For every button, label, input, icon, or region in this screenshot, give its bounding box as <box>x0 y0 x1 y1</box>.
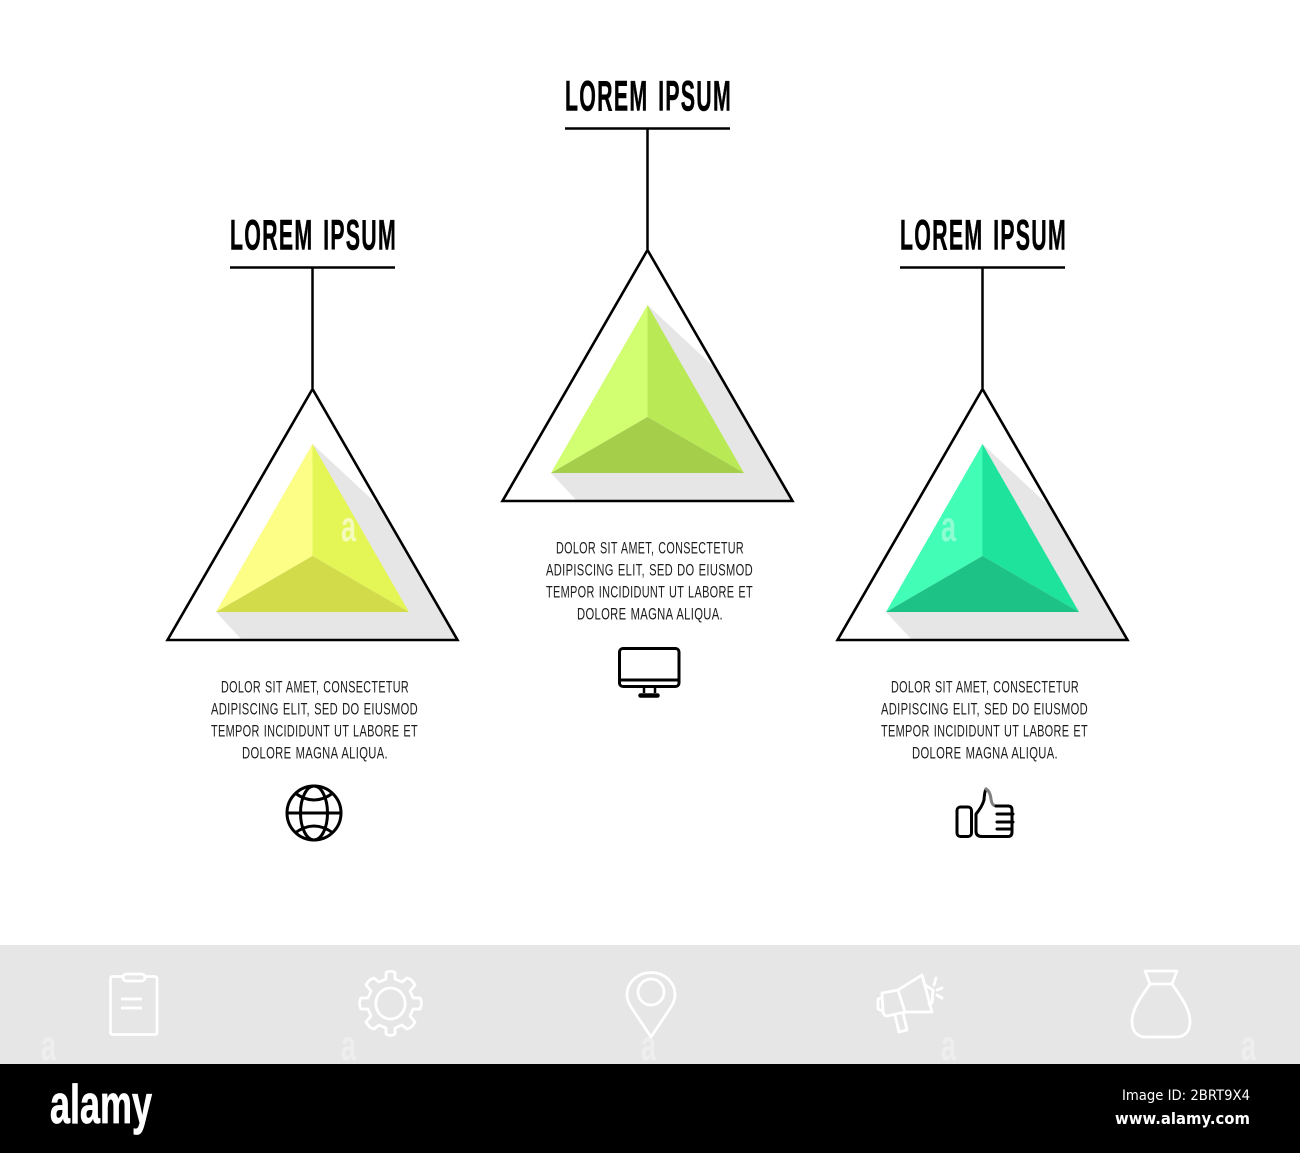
icon: clipboard <box>110 974 157 1034</box>
text block: left: DOLOR SIT AMET, CONSECTETUR <box>221 678 409 696</box>
icon: megaphone <box>878 975 942 1032</box>
watermark glyphs: band: a <box>641 1022 657 1070</box>
text block: middle: DOLORE MAGNA ALIQUA. <box>577 606 723 624</box>
panel: middle column <box>502 72 792 697</box>
panel: right column <box>838 212 1128 836</box>
text block: middle: ADIPISCING ELIT, SED DO EIUSMOD <box>546 562 753 580</box>
icon: globe <box>287 786 341 840</box>
text block: right: DOLORE MAGNA ALIQUA. <box>912 744 1058 762</box>
connector: right <box>900 268 1065 388</box>
shadow: left triangle <box>216 444 457 640</box>
text block: middle: TEMPOR INCIDIDUNT UT LABORE ET <box>546 584 753 602</box>
text block: right: ADIPISCING ELIT, SED DO EIUSMOD <box>881 700 1088 718</box>
watermark glyphs: band: a <box>341 1022 357 1070</box>
text block: right: DOLOR SIT AMET, CONSECTETUR <box>891 678 1079 696</box>
panel: black footer <box>0 1064 1300 1153</box>
website: www.alamy.com <box>1115 1109 1250 1128</box>
pyramid: lime <box>551 305 744 473</box>
text block: left: TEMPOR INCIDIDUNT UT LABORE ET <box>211 722 418 740</box>
text block: middle: DOLOR SIT AMET, CONSECTETUR <box>556 540 744 558</box>
connector: middle <box>565 128 730 249</box>
watermark glyphs: band: a <box>41 1022 57 1070</box>
panel: grey icon band <box>0 945 1300 1070</box>
text block: right: TEMPOR INCIDIDUNT UT LABORE ET <box>881 722 1088 740</box>
watermark glyphs: band <box>41 1022 1257 1070</box>
text block: right <box>881 678 1088 762</box>
shadow: right triangle <box>886 444 1127 640</box>
text block: middle <box>546 540 753 624</box>
icon: thumbs up <box>957 789 1013 836</box>
outer triangle: left <box>168 389 458 640</box>
watermark glyphs: band: a <box>1241 1022 1257 1070</box>
connector: left <box>230 268 395 388</box>
watermark glyph: left: a <box>341 503 357 551</box>
icon: location pin <box>627 972 675 1037</box>
outer triangle: middle <box>502 250 792 501</box>
icon: sack <box>1132 971 1190 1037</box>
image id: Image ID: 2BRT9X4 <box>1122 1088 1250 1104</box>
pyramid: green <box>886 444 1079 612</box>
shadow: middle triangle <box>551 305 792 501</box>
outer triangle: right <box>838 389 1128 640</box>
text block: left: DOLORE MAGNA ALIQUA. <box>242 744 388 762</box>
icon: monitor <box>620 648 679 697</box>
icon: gear <box>360 971 422 1036</box>
pyramid: yellow <box>216 444 409 612</box>
panel: left column <box>168 212 458 840</box>
panel: right column: LOREM IPSUM <box>900 212 1067 260</box>
watermark glyph: right: a <box>941 503 957 551</box>
text block: left <box>211 678 418 762</box>
panel: left column: LOREM IPSUM <box>230 212 397 260</box>
text block: left: ADIPISCING ELIT, SED DO EIUSMOD <box>211 700 418 718</box>
logo: alamy: alamy <box>50 1073 152 1135</box>
watermark glyphs: band: a <box>941 1022 957 1070</box>
panel: middle column: LOREM IPSUM <box>565 72 732 120</box>
